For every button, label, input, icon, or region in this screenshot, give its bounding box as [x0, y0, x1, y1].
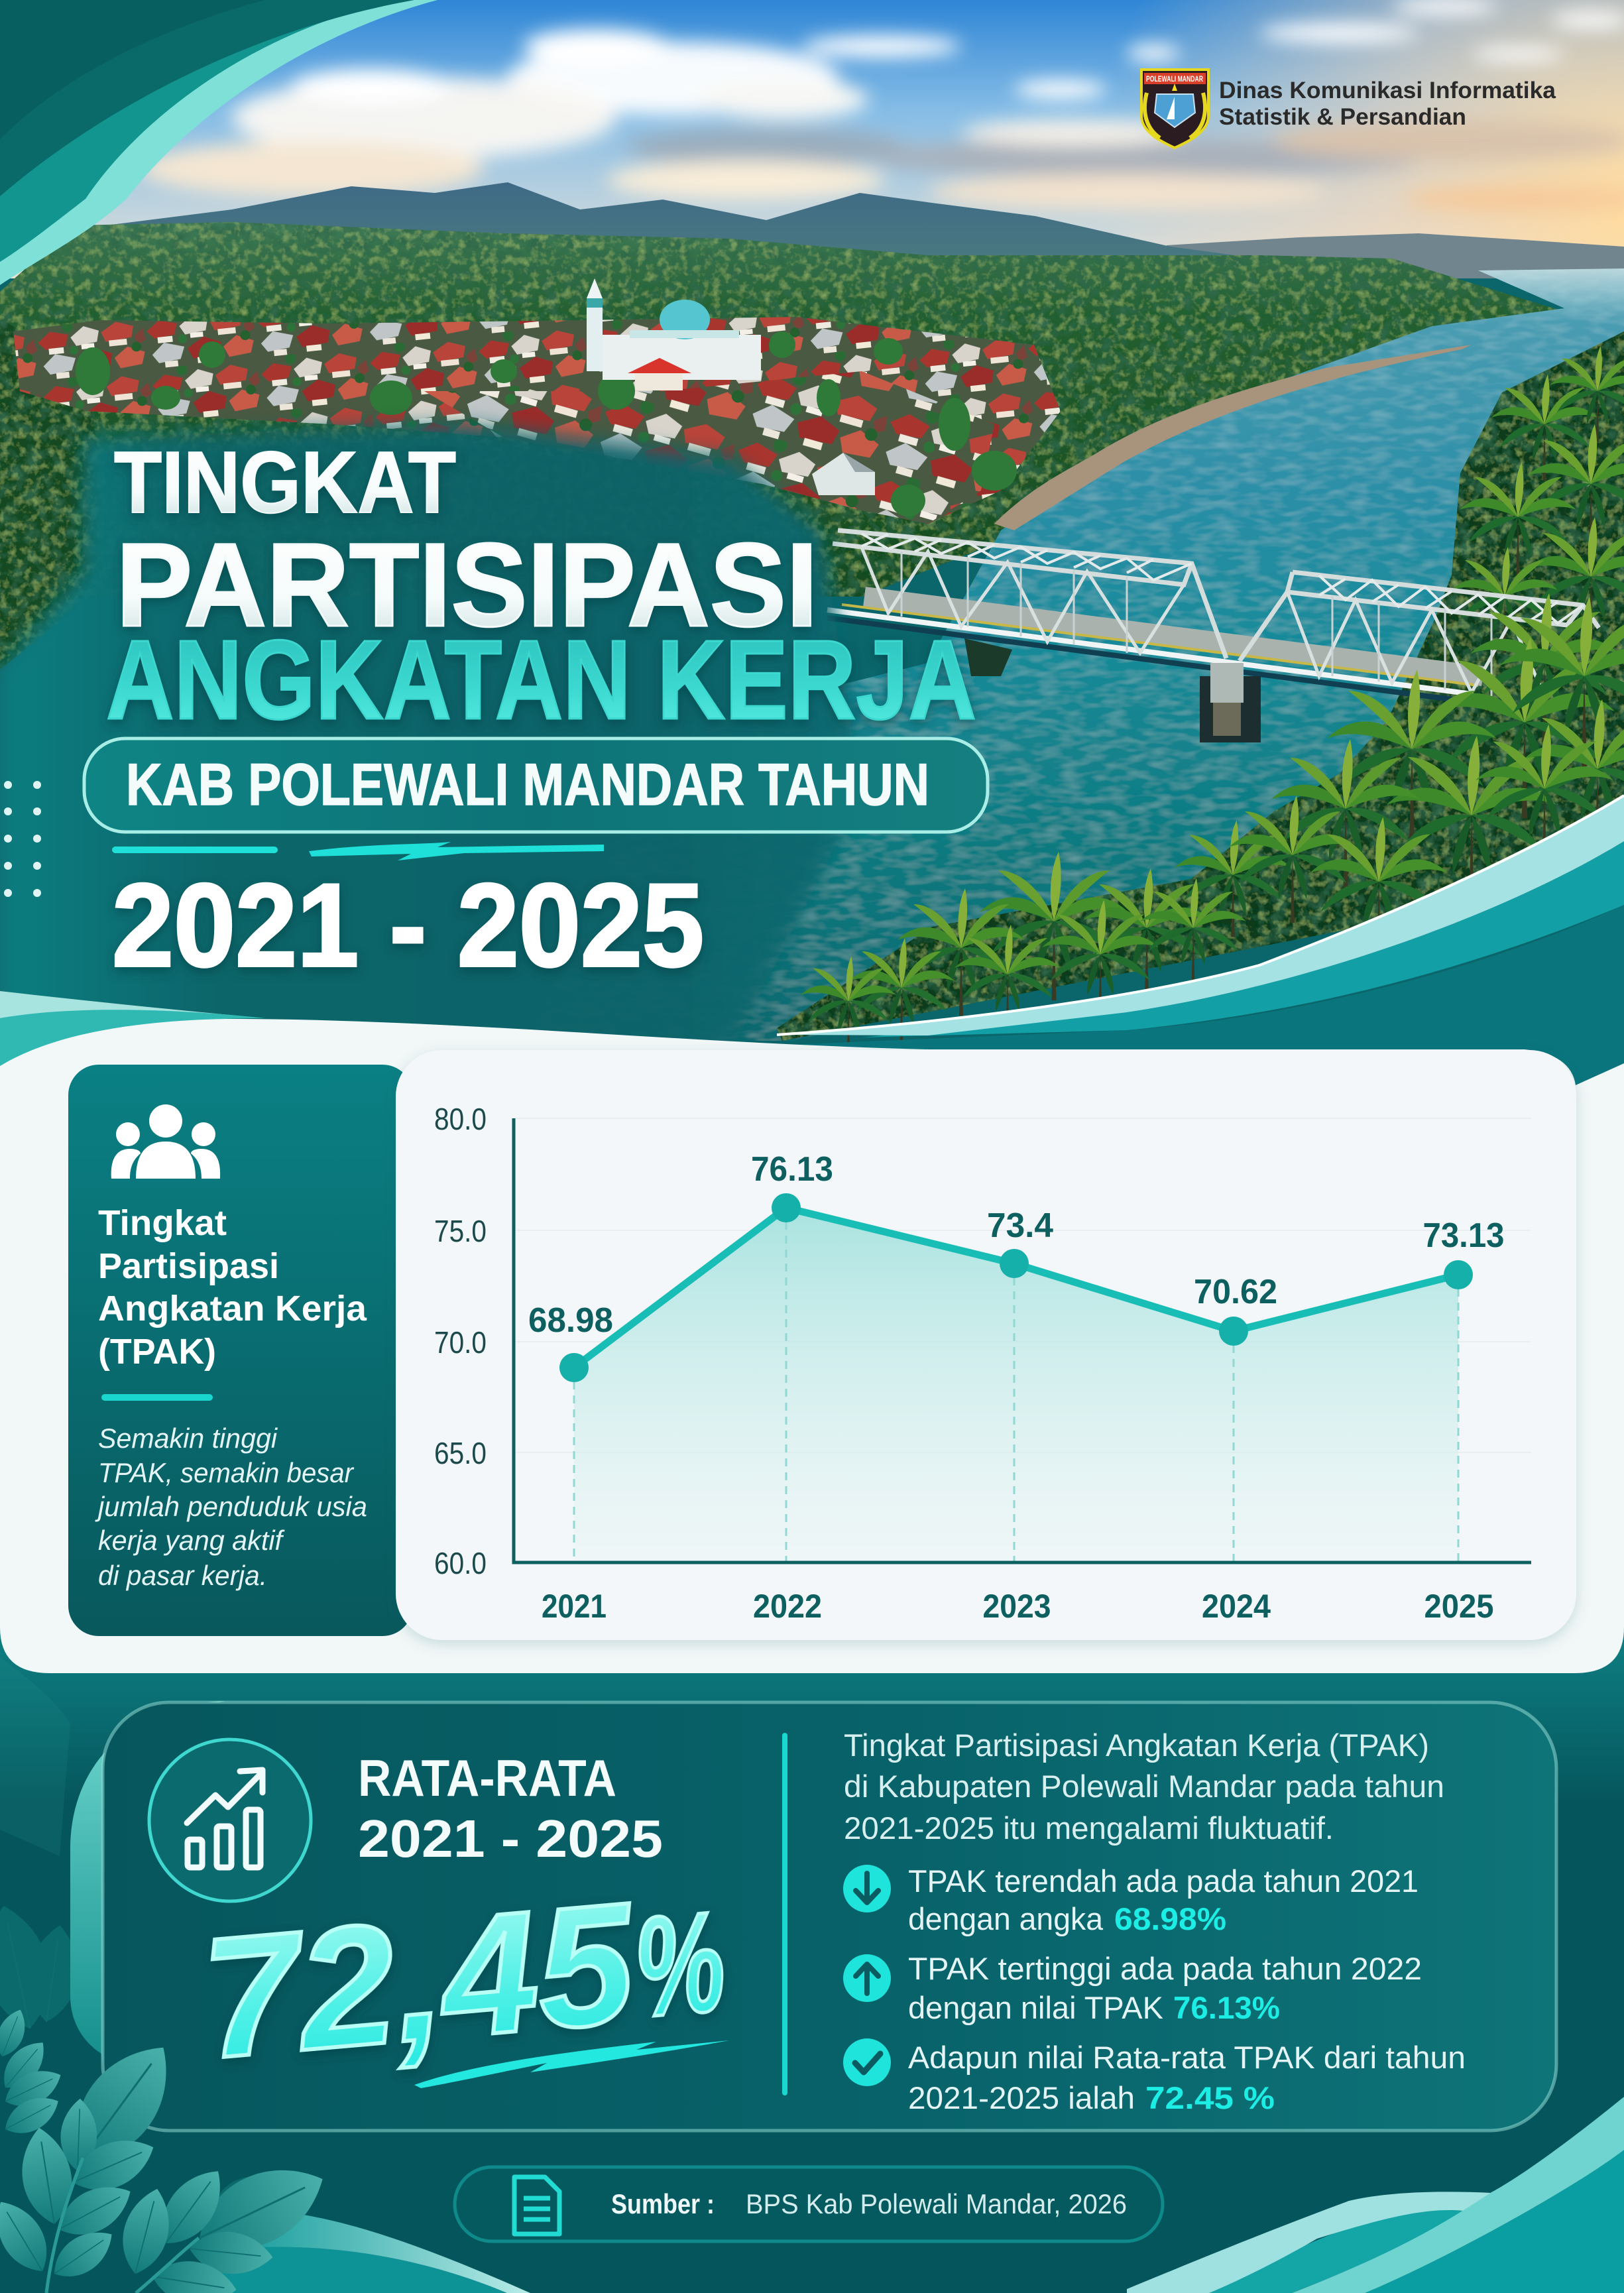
- left swoosh above white panel: [0, 991, 265, 1066]
- title line: Partisipasi: PARTISIPASI: [116, 518, 818, 651]
- data labels: 70.62: [1194, 1273, 1277, 1311]
- logo: coat of arms and agency name: Statistik & Persandian: [1219, 104, 1466, 130]
- deck: [864, 597, 1483, 676]
- title line: Tingkat: TINGKAT: [114, 434, 456, 531]
- data labels: 73.13: [1422, 1216, 1505, 1255]
- x axis labels: 2023: [982, 1588, 1051, 1625]
- title backdrop overlay: [0, 424, 862, 1054]
- distant hills: [1167, 233, 1624, 278]
- y axis labels: 75.0: [434, 1214, 487, 1248]
- y axis labels: [434, 1102, 487, 1580]
- lower section background: [0, 1617, 1624, 2293]
- bottom-left light wave: [237, 2211, 530, 2293]
- source text: Sumber :: [611, 2188, 715, 2219]
- chart area fill: [574, 1208, 1458, 1562]
- icon: people: [111, 1104, 220, 1179]
- drop lines: [574, 1208, 1458, 1562]
- panel description: di pasar kerja.: [98, 1560, 267, 1591]
- icon: highest arrow up: [843, 1954, 891, 2002]
- dark teal layer: [729, 905, 1624, 1127]
- summary intro: 2021-2025 itu mengalami fluktuatif.: [844, 1810, 1334, 1846]
- data labels: 73.4: [987, 1206, 1053, 1245]
- panel heading: (TPAK): [98, 1332, 216, 1372]
- town lower district: [424, 371, 994, 524]
- top-left corner swoosh: [0, 0, 437, 285]
- agency name: Dinas Komunikasi Informatika: [1219, 78, 1556, 103]
- y axis labels: 60.0: [434, 1546, 487, 1580]
- upper palms: [1452, 346, 1624, 653]
- panel description: kerja yang aktif: [98, 1525, 285, 1556]
- bottom swooshes: [199, 2097, 1624, 2293]
- white chart section backing: [0, 1019, 1624, 1673]
- y axis labels: 70.0: [434, 1325, 487, 1360]
- data labels: 68.98: [528, 1301, 613, 1340]
- icon: regency emblem: POLEWALI MANDAR: [1146, 74, 1203, 84]
- lower palms: [801, 593, 1624, 1051]
- bullet: highest value: TPAK tertinggi ada pada tahun 2022: [908, 1951, 1422, 1986]
- faint background leaves: [0, 1899, 281, 2229]
- mid teal layer: [862, 841, 1624, 1037]
- title line: Angkatan Kerja: ANGKATAN KERJA: [106, 617, 976, 743]
- subtitle pill: KAB POLEWALI MANDAR TAHUN: [126, 751, 929, 817]
- subtitle pill: [84, 738, 988, 832]
- average heading: RATA-RATA: [358, 1749, 616, 1807]
- bullet: highest value: [908, 1951, 1422, 2025]
- x axis labels: 2025: [1424, 1588, 1494, 1625]
- title: [106, 434, 976, 743]
- bullet: average value: 2021-2025 ialah: [908, 2080, 1135, 2115]
- stats panel: 2021 - 2025: [358, 1809, 663, 1868]
- bullet: lowest value: [908, 1863, 1419, 1936]
- average value: %: [628, 1881, 731, 2048]
- mosque: [587, 278, 761, 390]
- left info panel: [68, 1065, 413, 1636]
- panel left accent: [70, 1701, 225, 2082]
- panel description: [95, 1423, 367, 1591]
- truss: [833, 530, 1599, 661]
- decorative dots: [4, 781, 41, 897]
- white house: [812, 453, 875, 495]
- panel description: Semakin tinggi: [98, 1423, 278, 1454]
- panel divider: [101, 1394, 213, 1401]
- axes: [514, 1118, 1531, 1562]
- panel heading: [98, 1203, 367, 1372]
- icon: document: [514, 2177, 559, 2234]
- summary intro: di Kabupaten Polewali Mandar pada tahun: [844, 1769, 1444, 1804]
- foreground leaves: [0, 2005, 337, 2293]
- bullet: lowest value: 68.98%: [1114, 1901, 1226, 1936]
- source pill: [455, 2167, 1163, 2241]
- bullet: highest value: 76.13%: [1173, 1990, 1280, 2025]
- bottom-left teal wave: [199, 2247, 507, 2293]
- data labels: 76.13: [751, 1150, 833, 1189]
- clouds: [139, 0, 1624, 211]
- icon: growth chart in circle: [149, 1739, 311, 1901]
- lower header swoosh: [729, 795, 1624, 1127]
- summary intro: Tingkat Partisipasi Angkatan Kerja (TPAK): [844, 1728, 1429, 1763]
- bridge: [827, 530, 1599, 702]
- bullet: average value: 72.45 %: [1145, 2080, 1275, 2115]
- average value: 72,45: [196, 1866, 644, 2094]
- left forest: [0, 318, 172, 670]
- logo: coat of arms and agency name: [1141, 70, 1556, 148]
- panel heading: Angkatan Kerja: [98, 1289, 367, 1328]
- y axis labels: 80.0: [434, 1102, 487, 1136]
- town: [13, 317, 1061, 524]
- left edge accent glow: [0, 1657, 70, 1856]
- bullet: lowest value: dengan angka: [908, 1901, 1104, 1936]
- icon: lowest arrow down: [843, 1865, 891, 1912]
- bottom-right upper light wave: [1127, 2192, 1491, 2293]
- light band: [777, 795, 1624, 1035]
- riverbank shore: [994, 345, 1472, 530]
- bottom-right corner fill: [1365, 2150, 1624, 2293]
- icon: check: [843, 2038, 891, 2086]
- vertical divider: [782, 1733, 787, 2095]
- source pill: BPS Kab Polewali Mandar, 2026: [746, 2188, 1127, 2219]
- bridge pier: [1200, 663, 1261, 742]
- bottom-right main light wave: [1292, 2097, 1624, 2293]
- bullet: average value: [908, 2040, 1466, 2115]
- bottom-right teal fill: [1209, 2210, 1463, 2293]
- x axis labels: [542, 1588, 1494, 1625]
- y axis labels: 65.0: [434, 1436, 487, 1470]
- x axis labels: 2022: [753, 1588, 822, 1625]
- sunset glow: [862, 0, 1624, 278]
- panel heading: Partisipasi: [98, 1246, 279, 1286]
- data line: [574, 1208, 1458, 1368]
- panel heading: Tingkat: [98, 1203, 227, 1243]
- data labels: [528, 1150, 1505, 1340]
- line chart: [434, 1102, 1531, 1625]
- sky: [0, 0, 1624, 278]
- mountains: [80, 182, 1259, 265]
- stats panel: [70, 1701, 1556, 2131]
- years heading: 2021 - 2025: [112, 859, 704, 991]
- town tree clumps: [76, 331, 1017, 516]
- right palm forest base: [777, 331, 1624, 1041]
- summary intro: [844, 1728, 1444, 1846]
- bullet: highest value: dengan nilai TPAK: [908, 1990, 1163, 2025]
- small islet under bridge: [964, 638, 1012, 676]
- bullet: lowest value: TPAK terendah ada pada tahun 2021: [908, 1863, 1419, 1899]
- chart card: [396, 1050, 1576, 1640]
- value underline swoosh: [414, 2040, 729, 2088]
- x axis labels: 2021: [542, 1588, 607, 1625]
- data points: [559, 1193, 1473, 1382]
- icon: regency emblem: [1141, 70, 1208, 148]
- x axis labels: 2024: [1202, 1588, 1271, 1625]
- bullet: average value: Adapun nilai Rata-rata TPAK dari tahun: [908, 2040, 1466, 2075]
- header scenery: landscape photo: [0, 0, 1624, 1051]
- panel description: jumlah penduduk usia: [95, 1491, 367, 1522]
- forest: [0, 222, 1564, 597]
- title underline accents: [112, 842, 604, 860]
- panel description: TPAK, semakin besar: [98, 1457, 355, 1488]
- river: [530, 268, 1624, 1041]
